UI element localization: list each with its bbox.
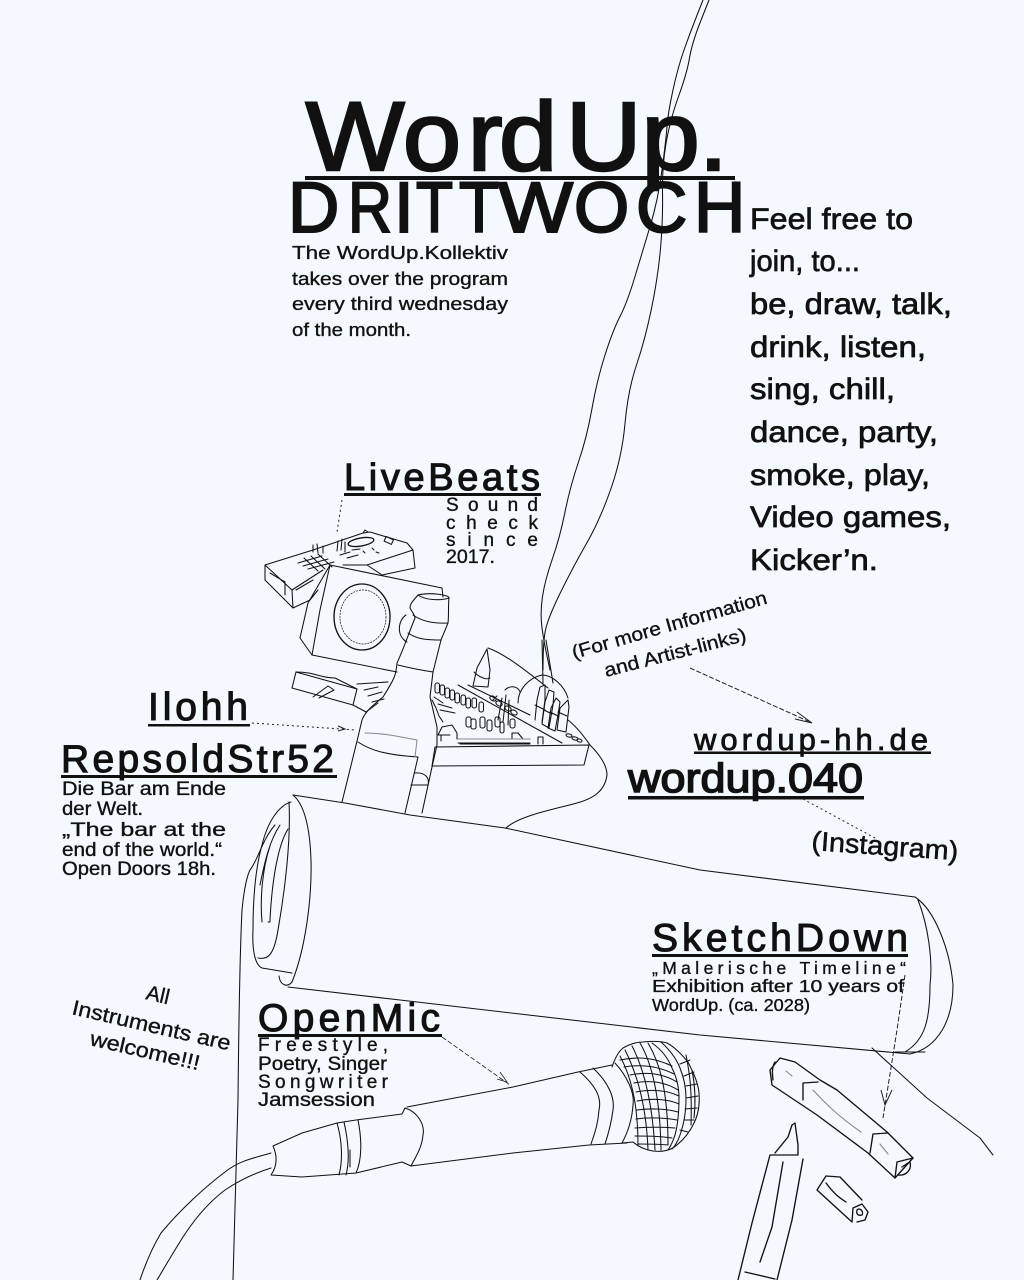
arrow: Ilohh to bottle [252, 723, 356, 730]
SketchDown description: Exhibition after 10 years of [652, 976, 904, 996]
LiveBeats section [344, 457, 541, 568]
illustration: microphone grille mesh [620, 1043, 698, 1150]
LiveBeats description: check [446, 513, 538, 534]
activity list [749, 203, 952, 577]
OpenMic description: Songwriter [258, 1072, 389, 1093]
subtitle: DRITTWOCH: O [574, 169, 629, 248]
subtitle: DRITTWOCH: W [498, 169, 573, 248]
venue description: Die Bar am Ende [62, 779, 226, 800]
LiveBeats description: 2017. [446, 547, 495, 568]
activity list: drink, listen, [750, 331, 926, 364]
instruments note: welcome!!! [87, 1027, 202, 1075]
arrow: SketchDown to marker [881, 975, 905, 1118]
illustration: paper roll [233, 795, 953, 1280]
activity list: Feel free to [750, 203, 913, 236]
illustration: mixer fader knobs [435, 683, 515, 733]
illustration: marker cap [817, 1176, 868, 1222]
instruments note: All [144, 981, 172, 1009]
arrow: info note to website [690, 668, 812, 723]
Instagram label: (Instagram) [811, 826, 959, 866]
intro text: of the month. [292, 319, 411, 340]
SketchDown section [652, 917, 908, 1015]
LiveBeats heading: LiveBeats [344, 457, 540, 499]
subtitle: DRITTWOCH: H [694, 169, 745, 248]
illustration: table edge line [872, 1048, 993, 1155]
illustration: open marker [738, 1123, 803, 1280]
illustration: audio mixer [432, 640, 607, 828]
activity list: be, draw, talk, [750, 288, 952, 321]
subtitle: DRITTWOCH: T [459, 169, 499, 248]
intro text: The WordUp.Kollektiv [292, 242, 509, 263]
subtitle: DRITTWOCH: I [394, 169, 414, 248]
OpenMic description: Freestyle, [258, 1035, 388, 1056]
OpenMic description: Poetry, Singer [258, 1054, 388, 1075]
LiveBeats description: Sound [446, 495, 538, 516]
illustration: marker pen [770, 1058, 913, 1178]
activity list: Kicker’n. [750, 544, 878, 577]
arrow: OpenMic to microphone [442, 1037, 510, 1085]
info note [570, 588, 770, 682]
instruments note [70, 981, 233, 1075]
arrow: LiveBeats to drum machine [337, 500, 342, 532]
venue description: „The bar at the [62, 820, 226, 841]
OpenMic section [258, 997, 442, 1111]
subtitle: DRITTWOCH: R [348, 169, 392, 248]
activity list: Video games, [750, 501, 951, 534]
arrow: handle to Instagram label [803, 799, 875, 838]
info note: and Artist-links) [602, 625, 749, 682]
illustration: cable loop around mixer [506, 720, 607, 828]
RepsoldStr52 heading: RepsoldStr52 [61, 738, 334, 781]
venue description: der Welt. [62, 799, 143, 820]
title block [288, 84, 745, 248]
illustration: speaker box [300, 565, 443, 672]
Ilohh heading: Ilohh [148, 686, 248, 729]
SketchDown description [652, 958, 906, 1015]
illustration: mixer jack plugs [473, 640, 569, 732]
intro text: every third wednesday [292, 293, 509, 314]
illustration: microphone [140, 1041, 699, 1280]
intro text: takes over the program [292, 268, 508, 289]
title: WordUp.: WordUp. [306, 84, 728, 191]
SketchDown description: „Malerische Timeline“ [652, 958, 906, 978]
SketchDown description: WordUp. (ca. 2028) [652, 995, 810, 1015]
info note: (For more Information [570, 588, 770, 664]
activity list: smoke, play, [750, 459, 930, 492]
subtitle: DRITTWOCH: C [636, 169, 687, 248]
illustration: turntable [292, 672, 388, 712]
activity list: dance, party, [750, 416, 938, 449]
OpenMic description [258, 1035, 389, 1111]
LiveBeats description: since [446, 530, 538, 551]
venue description [62, 779, 226, 880]
illustration: cables rising from mixer [541, 0, 709, 670]
venue description: end of the world.“ [62, 840, 222, 861]
activity list: sing, chill, [750, 373, 895, 406]
Ilohh and venue section [61, 686, 356, 880]
SketchDown heading: SketchDown [652, 917, 908, 960]
instruments note: Instruments are [70, 996, 233, 1055]
intro text [292, 242, 509, 340]
instagram handle: wordup.040 [627, 755, 863, 801]
OpenMic description: Jamsession [258, 1090, 375, 1111]
subtitle: DRITTWOCH: D [288, 169, 339, 248]
LiveBeats description [446, 495, 538, 568]
venue description: Open Doors 18h. [62, 859, 216, 880]
activity list: join, to... [749, 245, 860, 278]
subtitle: DRITTWOCH: T [416, 169, 453, 248]
illustration: drum machine [265, 530, 415, 608]
website link: wordup-hh.de [693, 722, 928, 757]
illustration: beer bottle [342, 594, 449, 813]
OpenMic heading: OpenMic [258, 997, 440, 1040]
